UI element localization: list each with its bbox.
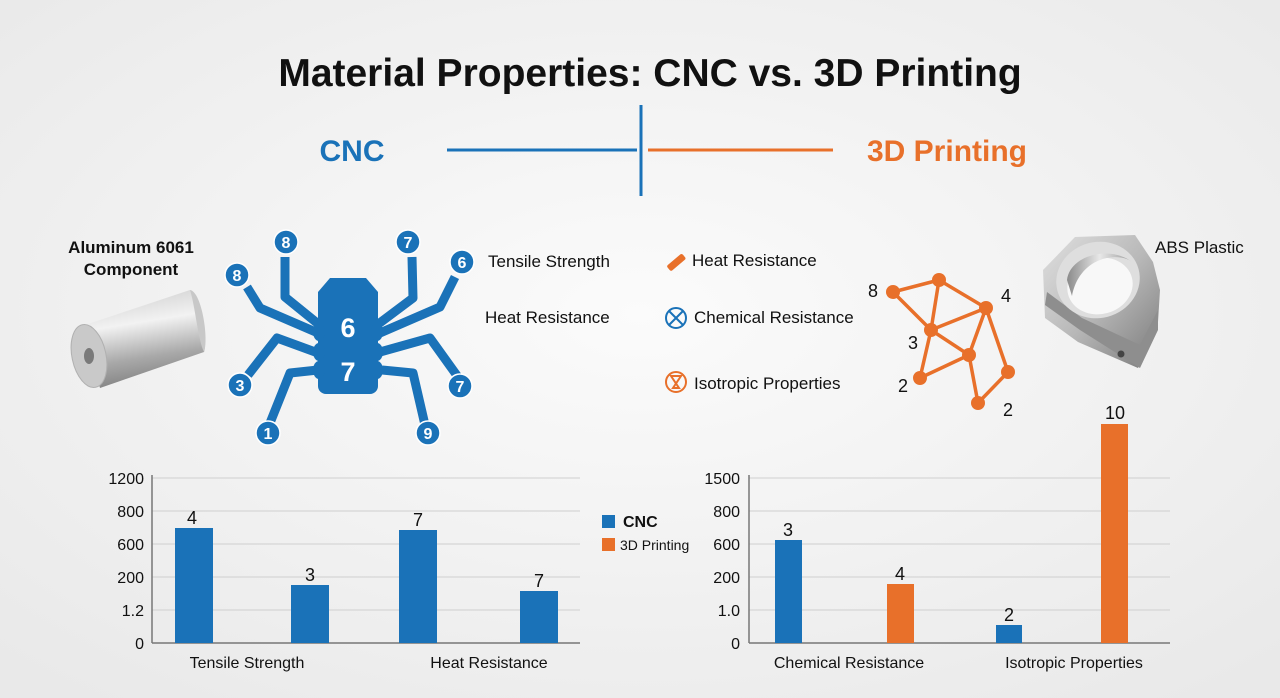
icon: chemical cross circle (666, 308, 686, 328)
icon: 3D printing network diagram (868, 273, 1015, 420)
bar chart: right: 3 (783, 520, 793, 540)
bar chart: CNC left (108, 471, 580, 672)
bar chart: CNC left: 0 (135, 636, 144, 653)
CNC property labels: Heat Resistance (485, 308, 610, 327)
icon: 3D printing network diagram: 2 (898, 376, 908, 396)
bar chart: right: 0 (731, 636, 740, 653)
bar chart: CNC left: 1.2 (122, 603, 144, 620)
icon: CNC spider diagram: 1 (264, 426, 273, 443)
3D printing property list with icons: Chemical Resistance (694, 308, 854, 327)
3D printing property list with icons: Heat Resistance (692, 251, 817, 270)
bar chart: CNC left: 800 (117, 504, 144, 521)
icon: 3D printing network diagram: 4 (1001, 286, 1011, 306)
bar chart: CNC left: 200 (117, 570, 144, 587)
bar chart: right: 200 (713, 570, 740, 587)
bar chart: right: 2 (1004, 605, 1014, 625)
icon: 3D printing network diagram: 2 (1003, 400, 1013, 420)
header: CNC vs 3D Printing divider: 3D Printing (867, 135, 1027, 168)
3D printing property list with icons (666, 251, 854, 393)
bar chart: right: 10 (1105, 403, 1125, 423)
icon: hourglass circle (666, 372, 686, 392)
legend: 3D Printing (620, 537, 689, 553)
bar chart: right (704, 403, 1170, 672)
icon: CNC spider diagram: 6 (340, 313, 356, 343)
icon: CNC spider diagram: 8 (282, 235, 291, 252)
icon: pencil (666, 253, 686, 271)
icon: CNC spider diagram: 8 (233, 268, 242, 285)
bar chart: right: 1500 (704, 471, 740, 488)
bar chart: right: 800 (713, 504, 740, 521)
bar chart: right: Isotropic Properties (1005, 655, 1143, 672)
title: Material Properties: CNC vs. 3D Printing (278, 52, 1022, 95)
CNC property labels (485, 252, 610, 327)
legend: CNC (623, 514, 658, 531)
icon: aluminum cylinder (66, 290, 206, 391)
bar chart: CNC left: 7 (534, 571, 544, 591)
icon: CNC spider diagram: 7 (404, 235, 413, 252)
bar chart: CNC left: 1200 (108, 471, 144, 488)
bar chart: CNC left: 600 (117, 537, 144, 554)
3D printing property list with icons: Isotropic Properties (694, 374, 840, 393)
icon: CNC spider diagram: 7 (340, 357, 356, 387)
bar chart: CNC left: 3 (305, 565, 315, 585)
bar chart: right: 1.0 (718, 603, 740, 620)
label: Aluminum 6061 Component: Aluminum 6061 (68, 238, 194, 257)
label: Aluminum 6061 Component: Component (84, 260, 179, 279)
bar chart: CNC left: Heat Resistance (430, 655, 548, 672)
bar chart: right: 600 (713, 537, 740, 554)
icon: CNC spider diagram: 7 (456, 379, 465, 396)
CNC property labels: Tensile Strength (488, 252, 610, 271)
bar chart: CNC left: 4 (187, 508, 197, 528)
icon: 3D printing network diagram: 3 (908, 333, 918, 353)
bar chart: CNC left: Tensile Strength (190, 655, 304, 672)
icon: CNC spider diagram: 3 (236, 378, 245, 395)
icon: CNC spider diagram: 9 (424, 426, 433, 443)
label: ABS Plastic: ABS Plastic (1155, 238, 1244, 257)
icon: 3D printing network diagram: 8 (868, 281, 878, 301)
legend (602, 514, 689, 553)
bar chart: right: Chemical Resistance (774, 655, 924, 672)
header: CNC vs 3D Printing divider: CNC (320, 135, 384, 168)
bar chart: right: 4 (895, 564, 905, 584)
bar chart: CNC left: 7 (413, 510, 423, 530)
icon: CNC spider diagram: 6 (458, 255, 467, 272)
icon: CNC spider diagram (225, 230, 474, 445)
header: CNC vs 3D Printing divider (320, 105, 1027, 196)
icon: ABS plastic part (1043, 232, 1160, 368)
